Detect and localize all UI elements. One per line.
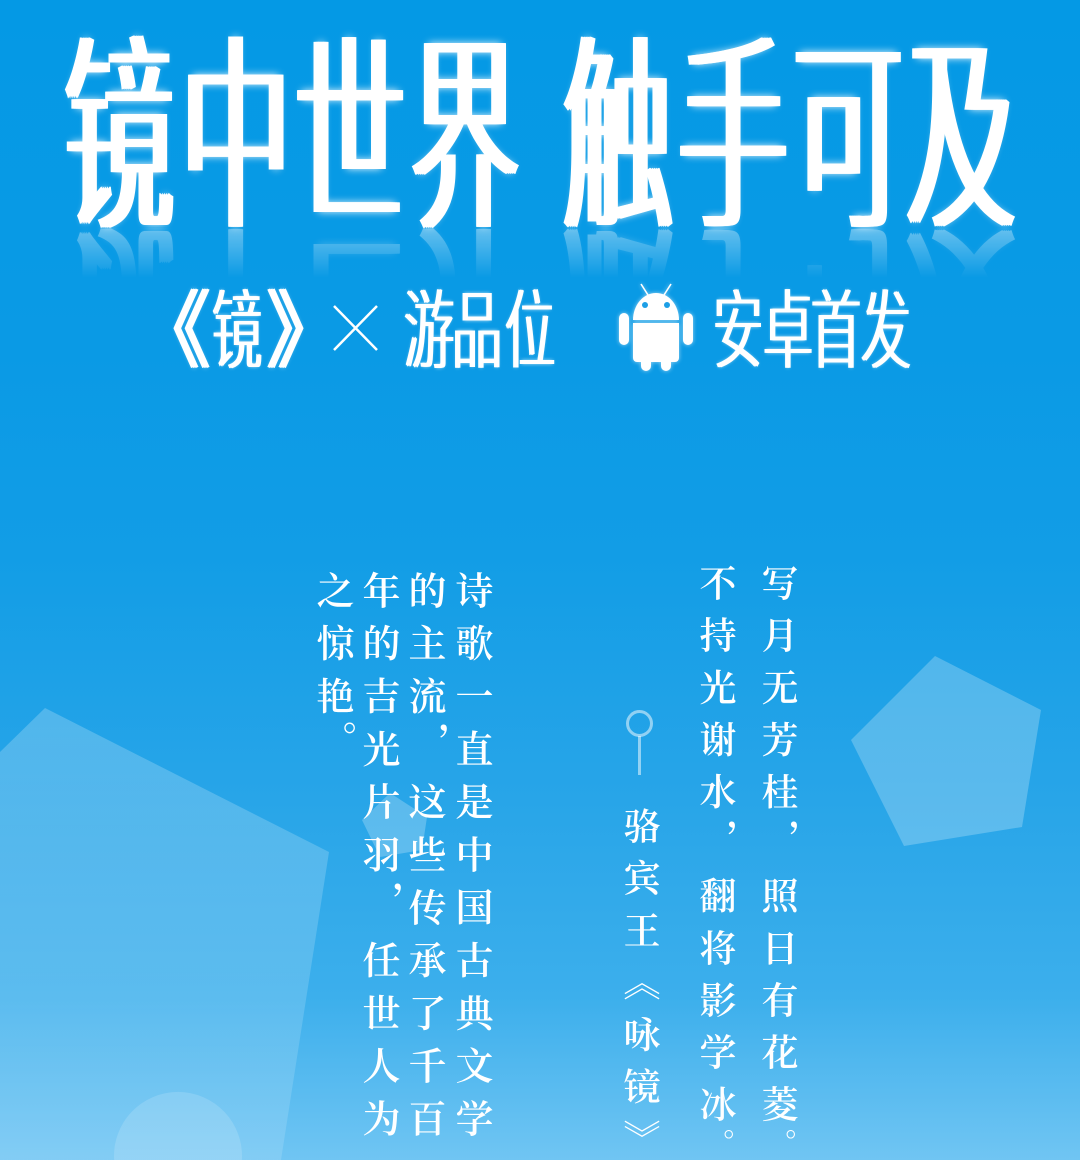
- icon: pin marker: [626, 710, 653, 775]
- text block: intro column 1: 诗歌一直是中国古典文学: [449, 571, 491, 1152]
- text block: poem attribution: 骆宾王《咏镜 》: [617, 807, 658, 1157]
- text block: poem column 1: 写月无芳桂， 照日有花菱。: [755, 564, 798, 1158]
- text block: intro column 2: 的主流， 这些传承了千百: [402, 571, 448, 1152]
- subtitle: 安: [713, 284, 763, 380]
- title: [64, 24, 1016, 274]
- icon: android robot: [616, 282, 696, 374]
- title: 可: [794, 24, 902, 258]
- subtitle: 》: [266, 284, 342, 380]
- title: 镜: [65, 24, 173, 258]
- title: 世: [296, 24, 404, 258]
- subtitle: 首: [811, 284, 861, 380]
- title: 界: [411, 24, 519, 258]
- text block: intro column 3: 年的吉光片羽， 任世人为: [356, 571, 402, 1152]
- title: 手: [679, 24, 787, 258]
- subtitle: 游: [404, 284, 454, 380]
- title: 及: [907, 24, 1015, 258]
- subtitle: 卓: [763, 284, 813, 380]
- subtitle: 位: [505, 284, 555, 380]
- subtitle: 品: [452, 284, 502, 380]
- subtitle: 镜: [212, 284, 262, 380]
- text block: intro column 4: 之惊艳。: [310, 571, 355, 773]
- subtitle: 《: [136, 284, 210, 380]
- subtitle: 发: [861, 284, 911, 380]
- title: 中: [182, 24, 290, 258]
- subtitle: [136, 284, 911, 380]
- icon: times sign: [333, 305, 378, 351]
- title: 触: [564, 24, 672, 258]
- text block: poem column 2: 不持光谢水， 翻将影学冰。: [693, 564, 736, 1158]
